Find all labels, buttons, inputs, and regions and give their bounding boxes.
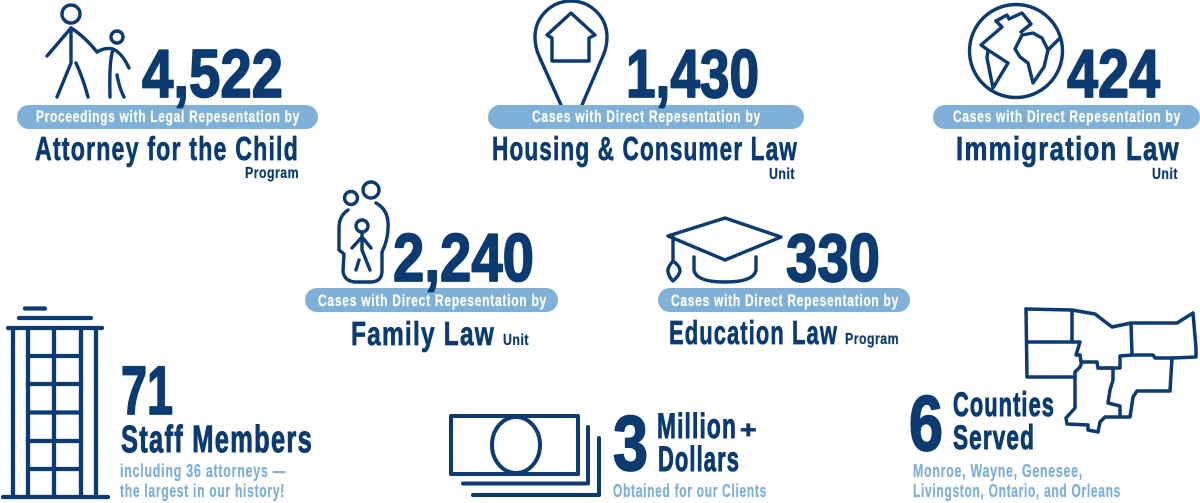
sub label: Unit	[503, 332, 529, 349]
description: Monroe, Wayne, Genesee,	[913, 461, 1083, 481]
icon: family	[339, 182, 388, 282]
panel: family law	[305, 182, 558, 352]
number: 2,240: 2,240	[393, 220, 534, 296]
description	[120, 461, 286, 501]
heading	[657, 407, 758, 479]
label pill	[305, 288, 558, 312]
heading: +	[740, 417, 758, 444]
heading	[953, 386, 1055, 457]
panel: dollars obtained	[449, 412, 766, 498]
label pill	[933, 105, 1200, 129]
pill text: Cases with Direct Repesentation by	[532, 107, 761, 126]
heading: Dollars	[658, 440, 740, 479]
pill text: Cases with Direct Repesentation by	[318, 291, 547, 310]
heading: Education Law	[669, 314, 838, 351]
number: 330: 330	[786, 220, 880, 296]
heading: Staff Members	[121, 419, 313, 461]
heading: Attorney for the Child	[35, 130, 299, 167]
description: Obtained for our Clients	[613, 481, 767, 501]
label pill	[488, 105, 804, 129]
label pill	[658, 288, 910, 312]
description	[913, 461, 1121, 501]
sub label: Unit	[1152, 166, 1178, 183]
number: 3: 3	[613, 399, 648, 487]
description: including 36 attorneys —	[120, 461, 286, 481]
icon: stack of money	[451, 416, 599, 495]
heading: Counties	[953, 386, 1055, 424]
number: 1,430: 1,430	[626, 36, 759, 112]
number: 4,522: 4,522	[142, 36, 283, 112]
heading: Family Law	[351, 315, 495, 352]
description: the largest in our history!	[120, 481, 285, 501]
pill text: Proceedings with Legal Repesentation by	[36, 107, 300, 126]
heading: Served	[953, 419, 1035, 457]
panel: staff members	[3, 308, 313, 501]
label pill	[17, 105, 318, 129]
sub label: Program	[845, 331, 899, 348]
number: 71: 71	[121, 352, 173, 429]
heading: Million	[657, 407, 737, 446]
icon: county map	[1026, 309, 1196, 432]
number: 6: 6	[909, 379, 943, 467]
panel: immigration law	[933, 4, 1200, 183]
panel: counties served	[909, 309, 1196, 501]
panel: housing and consumer law	[488, 1, 804, 183]
number: 424: 424	[1067, 36, 1160, 112]
sub label: Program	[245, 165, 299, 182]
icon: location pin with house	[535, 1, 607, 105]
sub label: Unit	[769, 166, 795, 183]
icon: globe	[970, 4, 1062, 98]
icon: graduation cap	[668, 218, 781, 282]
icon: office building	[3, 308, 108, 497]
pill text: Cases with Direct Repesentation by	[671, 291, 899, 310]
heading: Housing & Consumer Law	[492, 130, 798, 167]
panel: attorney for the child	[17, 5, 318, 182]
panel: education law	[658, 218, 910, 351]
icon: adult and child	[47, 5, 129, 97]
